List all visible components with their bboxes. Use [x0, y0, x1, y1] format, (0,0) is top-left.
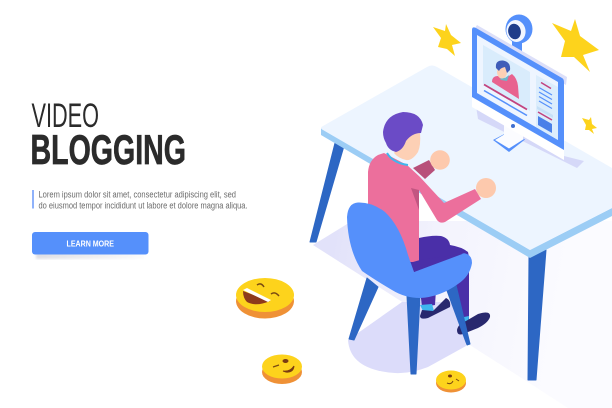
collar	[387, 153, 408, 165]
sidebar lines	[539, 88, 552, 108]
chair	[347, 202, 472, 374]
star big	[552, 19, 599, 72]
sidebar panel	[536, 75, 558, 140]
webcam neck	[512, 38, 522, 56]
wink	[273, 365, 279, 367]
far leg and shoe	[420, 290, 450, 319]
sidebar	[536, 75, 558, 140]
torso over chair	[396, 225, 419, 262]
far shoe	[420, 298, 450, 319]
webcam inner	[504, 18, 528, 44]
eyes	[257, 284, 279, 296]
smile	[283, 366, 294, 372]
mouth	[243, 291, 270, 304]
heading line: BLOGGING: BLOGGING	[30, 126, 186, 173]
button label: LEARN MORE	[66, 239, 114, 248]
far hand	[430, 150, 450, 170]
table edge	[321, 128, 612, 258]
wink and smile	[447, 379, 459, 384]
coin face	[262, 354, 302, 378]
subtitle line	[484, 90, 527, 116]
floor shadow of table	[313, 221, 612, 408]
near leg and shoe	[455, 268, 490, 334]
description lines: Lorem ipsum dolor sit amet, consectetur adipiscing elit, sed	[38, 190, 236, 200]
chair right leg	[446, 285, 470, 345]
eye	[282, 359, 288, 363]
eye	[448, 374, 452, 378]
near shoe	[457, 313, 490, 334]
face	[394, 133, 420, 160]
monitor back	[474, 25, 567, 85]
webcam ring	[506, 14, 532, 44]
stand base top	[495, 131, 524, 148]
hip over chair	[413, 253, 465, 272]
coin side	[436, 374, 466, 392]
monitor chin	[472, 96, 564, 160]
coin face	[436, 370, 466, 390]
hair	[383, 112, 423, 152]
description lines: do eiusmod tempor incididunt ut labore et dolore magna aliqua.	[38, 200, 247, 212]
torso and arm	[368, 153, 481, 262]
description text block	[32, 190, 247, 212]
monitor	[472, 14, 584, 168]
webcam	[504, 14, 532, 56]
stand base edge	[493, 131, 525, 152]
near lower leg	[455, 268, 469, 322]
emoji: winking	[262, 354, 302, 384]
chair shell	[347, 202, 472, 298]
table	[310, 66, 612, 380]
coin side	[262, 360, 302, 384]
chair floor shadow	[348, 302, 466, 373]
monitor frame	[472, 27, 564, 150]
button: learn more	[32, 232, 148, 259]
thigh	[410, 236, 470, 275]
chair left leg	[349, 278, 378, 340]
emoji: laughing	[236, 278, 294, 318]
sidebar heading	[541, 82, 551, 88]
person back layer	[368, 112, 496, 334]
webcam lens	[507, 23, 522, 40]
monitor shadow on desk	[476, 106, 584, 168]
table far leg	[310, 143, 344, 242]
coin side	[236, 284, 294, 318]
near sock	[459, 316, 469, 328]
stand neck	[504, 118, 523, 146]
chair middle leg	[407, 296, 420, 374]
button shadow	[36, 252, 144, 259]
sidebar block heading	[538, 112, 552, 120]
power dot	[511, 124, 515, 128]
monitor screen	[477, 35, 558, 140]
monitor stand	[493, 118, 525, 152]
emoji: small winking	[436, 370, 466, 392]
description lines	[38, 190, 247, 212]
presenter body	[492, 74, 519, 99]
far arm	[413, 160, 435, 179]
coin face	[236, 278, 294, 312]
button body	[32, 232, 148, 254]
presenter hair	[496, 60, 510, 73]
heading line: VIDEO: VIDEO	[32, 97, 99, 135]
far sock	[420, 304, 434, 313]
near hand	[476, 178, 496, 198]
far lower leg	[420, 290, 436, 307]
heading: video blogging	[30, 97, 186, 173]
sidebar block	[538, 116, 552, 133]
sidebar divider	[537, 106, 553, 118]
accent bar	[32, 190, 34, 208]
teeth	[243, 288, 271, 302]
video frame	[483, 45, 530, 111]
title line	[484, 84, 527, 110]
presenter face	[497, 66, 507, 78]
star small	[582, 117, 597, 134]
table top	[321, 66, 612, 250]
presenter collar	[498, 75, 509, 81]
arm fold	[411, 188, 419, 210]
star left	[433, 24, 461, 56]
table near leg	[528, 250, 546, 380]
video panel	[483, 45, 530, 116]
